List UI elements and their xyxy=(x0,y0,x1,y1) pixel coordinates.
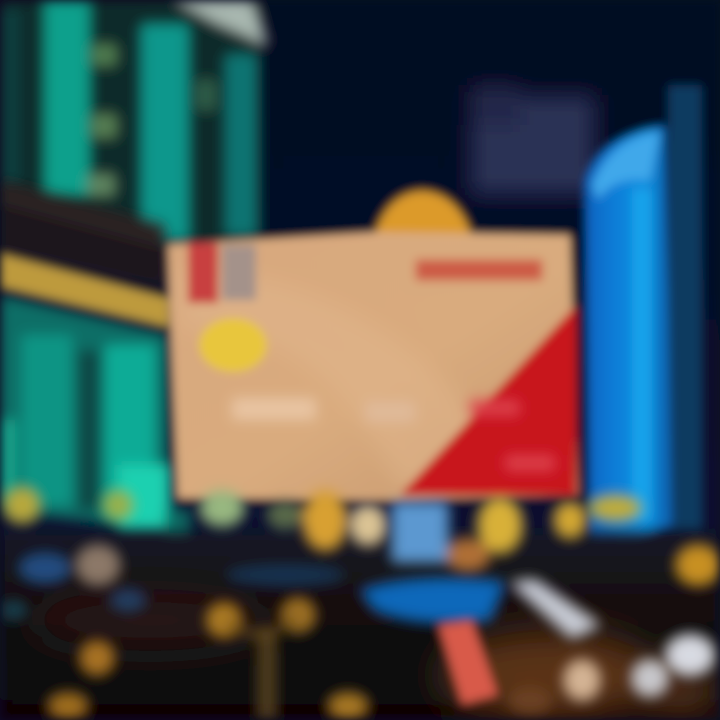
building: upper left teal tower xyxy=(0,0,268,245)
card number marks xyxy=(232,398,415,422)
red triangle xyxy=(400,305,576,495)
blue tower xyxy=(585,85,702,562)
blue car roof xyxy=(360,578,505,622)
ground: warm brown glow xyxy=(30,590,720,720)
red tail sign xyxy=(438,620,498,705)
credit card xyxy=(168,232,578,500)
card sheen xyxy=(180,270,520,490)
building: lower left teal block xyxy=(0,295,190,550)
street lamp xyxy=(207,598,315,720)
left bokeh lights xyxy=(4,487,386,550)
street lights and traffic xyxy=(0,487,720,720)
white car highlight xyxy=(510,580,600,638)
centre and right bokeh lights xyxy=(392,495,720,585)
ground: dark street xyxy=(0,532,720,720)
red and grey flag logo xyxy=(188,243,256,303)
distant grey building xyxy=(470,85,595,195)
card body xyxy=(168,232,578,500)
sun dome above card xyxy=(372,190,474,240)
building: dark band xyxy=(0,180,165,285)
chip xyxy=(199,318,267,372)
lower right car lights xyxy=(508,635,714,714)
card brand text mark xyxy=(416,260,542,280)
building: gold band xyxy=(0,253,170,328)
lower amber lights xyxy=(48,641,368,719)
left traffic blobs xyxy=(0,545,345,620)
red panel text marks xyxy=(470,400,555,471)
